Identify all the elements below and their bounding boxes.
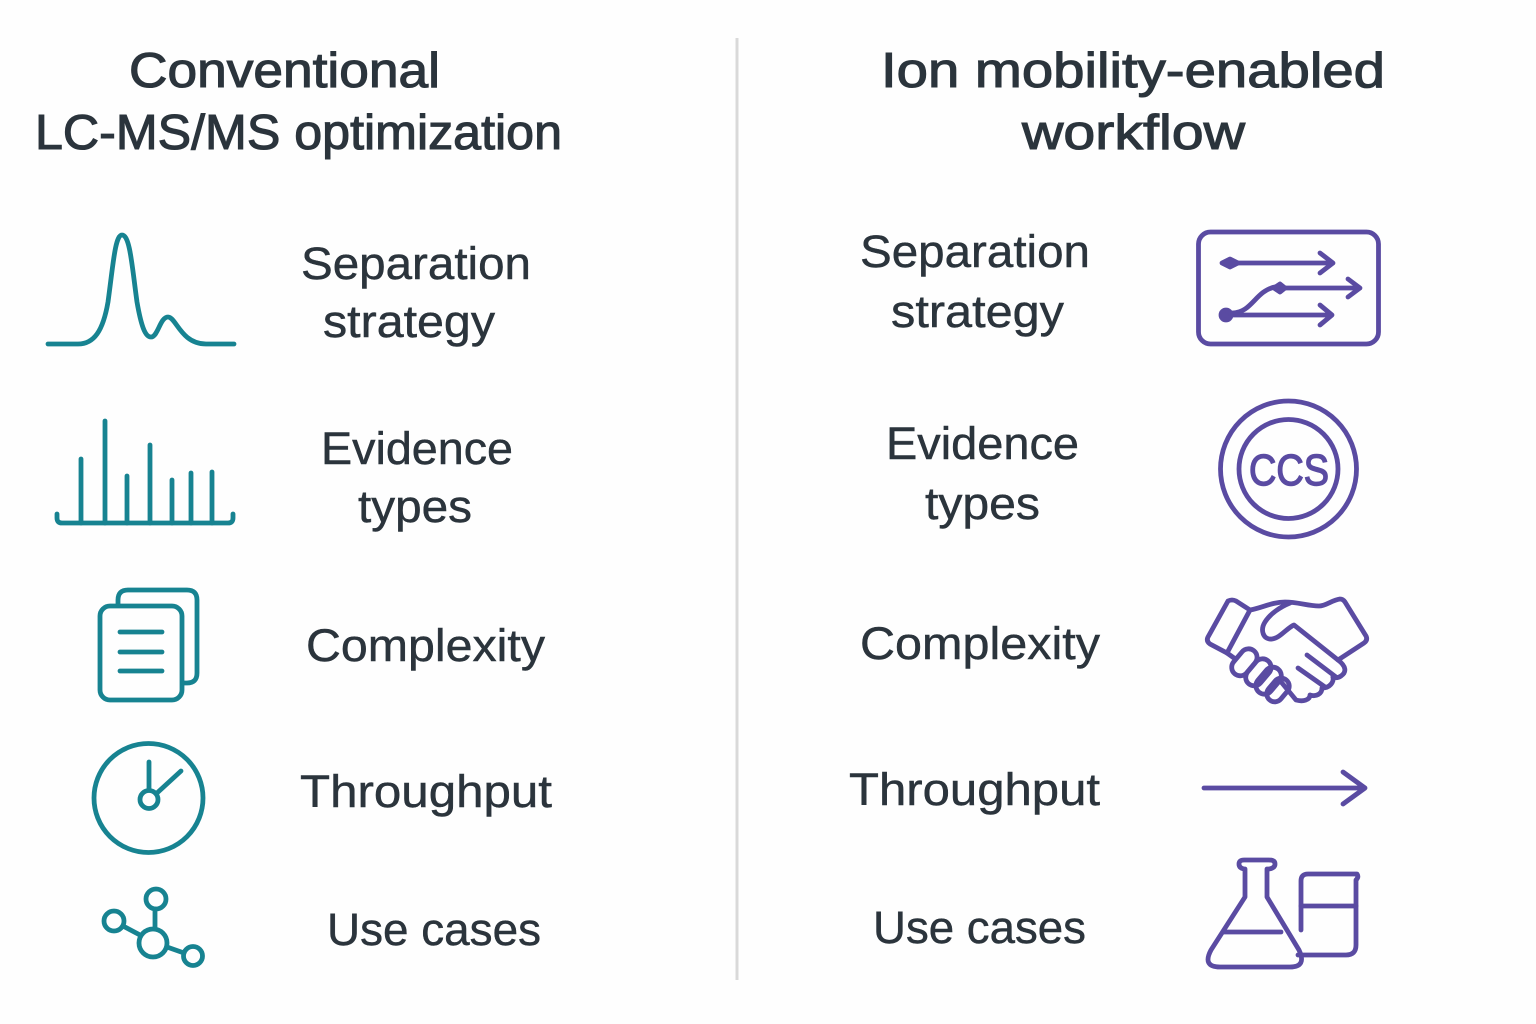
icon: ion separation paths bbox=[1198, 232, 1378, 344]
label: separation strategy: Separation bbox=[301, 238, 531, 289]
icon: mass spectrum bbox=[57, 421, 233, 523]
icon: CCS badge bbox=[1220, 401, 1356, 537]
heading: conventional: Conventional bbox=[129, 44, 440, 98]
label: throughput: Throughput bbox=[300, 766, 553, 817]
label: separation strategy: Separation bbox=[860, 226, 1090, 277]
label: evidence types bbox=[321, 423, 513, 532]
icon: stacked documents bbox=[100, 590, 197, 700]
heading: ion mobility: Ion mobility-enabled bbox=[881, 44, 1385, 98]
heading: ion mobility bbox=[881, 44, 1385, 160]
label: evidence types: Evidence bbox=[886, 418, 1079, 469]
icon: handshake bbox=[1207, 599, 1367, 705]
icon: right arrow bbox=[1204, 772, 1365, 804]
icon: flask and beaker bbox=[1208, 860, 1358, 967]
label: use cases: Use cases bbox=[873, 902, 1086, 953]
icon: CCS badge: CCS bbox=[1249, 446, 1329, 495]
label: evidence types: types bbox=[925, 478, 1040, 529]
label: separation strategy bbox=[301, 238, 531, 347]
label: complexity: Complexity bbox=[306, 620, 546, 671]
icon: molecule network bbox=[104, 889, 202, 966]
heading: conventional: LC-MS/MS optimization bbox=[35, 106, 562, 160]
heading: conventional bbox=[35, 44, 562, 160]
icon: clock bbox=[94, 744, 203, 852]
label: complexity: Complexity bbox=[860, 618, 1101, 669]
label: evidence types: types bbox=[358, 481, 472, 532]
heading: ion mobility: workflow bbox=[1021, 106, 1246, 160]
label: separation strategy: strategy bbox=[323, 296, 496, 347]
label: separation strategy bbox=[860, 226, 1090, 337]
panel: conventional LC-MS/MS optimization bbox=[35, 44, 562, 966]
icon: chromatographic peak bbox=[48, 235, 234, 344]
label: use cases: Use cases bbox=[327, 904, 541, 955]
label: throughput: Throughput bbox=[849, 764, 1101, 815]
panel: ion mobility-enabled workflow bbox=[849, 44, 1385, 967]
label: evidence types bbox=[886, 418, 1079, 529]
label: separation strategy: strategy bbox=[891, 286, 1065, 337]
label: evidence types: Evidence bbox=[321, 423, 513, 474]
